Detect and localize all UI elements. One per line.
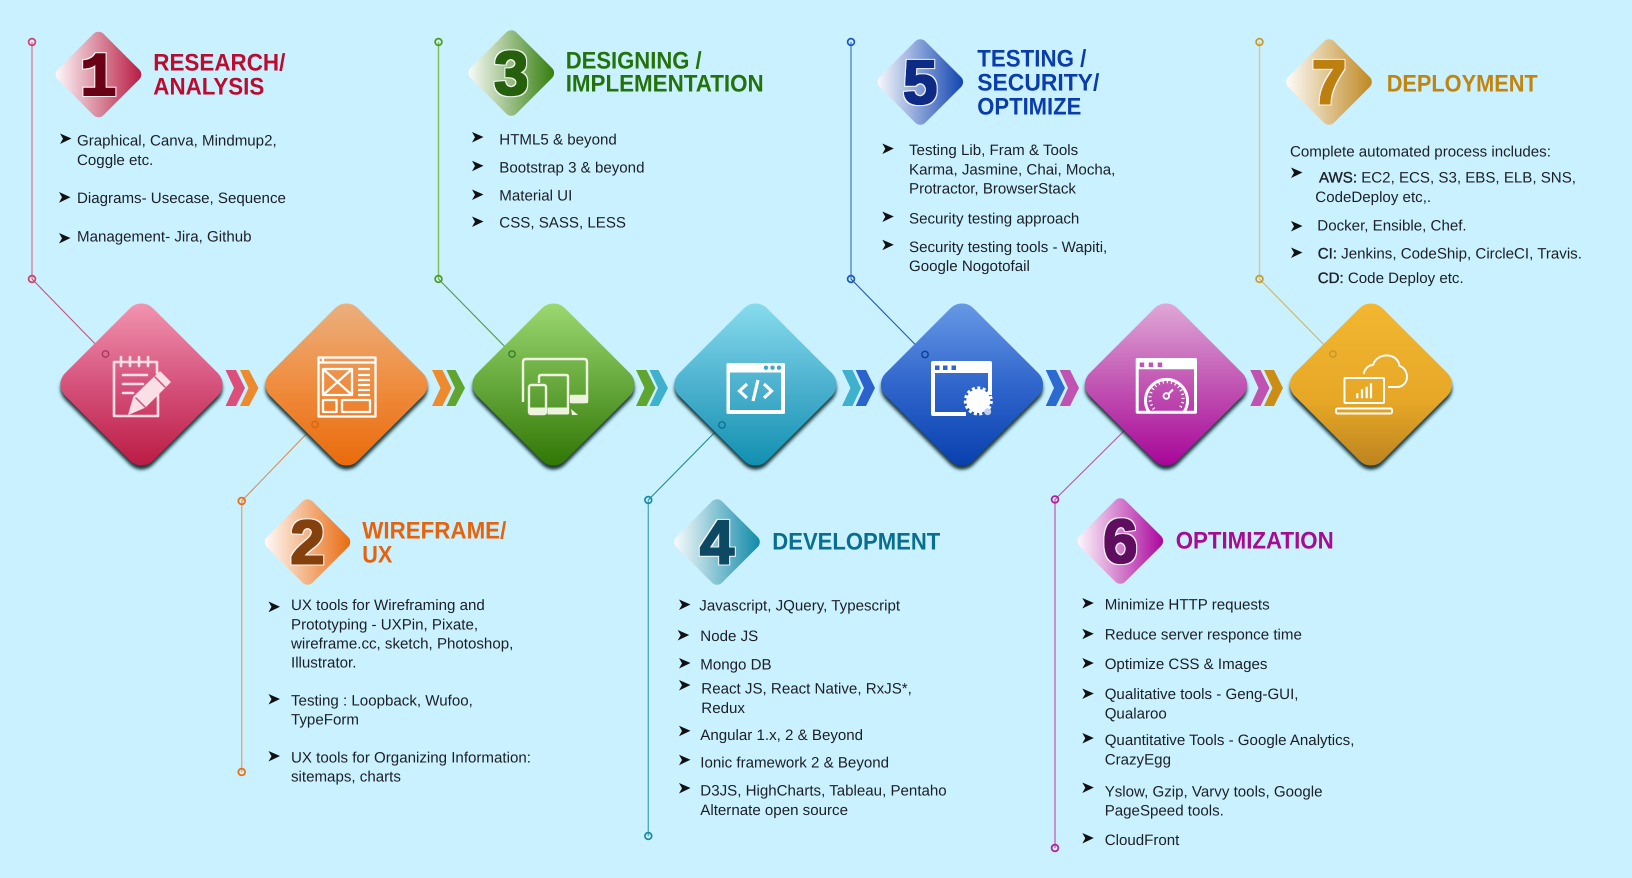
main diamond 7: cloud laptop [1283,297,1459,476]
list: development items: Redux [701,700,745,717]
list: development items: React JS, React Native, RxJS*, [701,681,912,698]
list: deployment items [1290,144,1582,287]
list: wireframe items: UX tools for Wireframing and [291,597,485,614]
icon: settings window [931,361,992,416]
panel: step 5 testing / security / optimize [875,36,1115,275]
heading: research analysis: RESEARCH/ [153,50,286,77]
list: optimization items: PageSpeed tools. [1105,802,1224,819]
list: optimization items: Minimize HTTP requests [1105,597,1270,614]
list: deployment items: CodeDeploy etc,. [1315,189,1431,206]
list: wireframe items [268,597,531,786]
list: designing items: Material UI [499,187,572,204]
list: development items: Node JS [700,628,758,645]
heading: research analysis: ANALYSIS [153,74,264,101]
badge: number 2: 2 [290,508,325,578]
connector: step 5 [848,39,925,354]
panel: step 6 optimization [1075,495,1354,849]
heading: testing security optimize: OPTIMIZE [977,93,1081,120]
connector: step 3 [435,39,512,354]
main diamond 6: speedometer [1078,297,1254,476]
icon: notepad and pencil [114,357,170,416]
badge: number 7: 7 [1312,48,1346,118]
list: research items: Graphical, Canva, Mindmup2, [77,133,277,150]
list: wireframe items: Prototyping - UXPin, Pixate, [291,616,478,633]
main diamond 1: notepad [54,297,229,476]
list: designing items: Bootstrap 3 & beyond [499,160,644,177]
list: optimization items: Qualaroo [1105,705,1167,722]
list: research items [59,133,286,246]
list: testing items: Security testing tools - Wapiti, [909,239,1107,256]
panel: step 3 designing / implementation [466,27,764,232]
arrow: step 1 to 2 [226,370,258,406]
badge: number 7 [1283,36,1375,128]
arrow: step 5 to 6 [1046,370,1079,406]
heading: designing implementation: DESIGNING / [566,47,702,74]
icon: code window [726,363,785,414]
list: optimization items: CrazyEgg [1105,751,1171,768]
icon: speedometer window [1136,358,1197,414]
heading: designing implementation [566,47,764,98]
connector: step 7 [1256,39,1333,354]
connector: step 2 [238,425,315,775]
icon: wireframe layout [318,358,376,416]
main diamond 2: wireframe [259,297,434,476]
heading: deployment: DEPLOYMENT [1387,71,1538,98]
arrow: step 2 to 3 [432,370,465,406]
heading: wireframe ux: WIREFRAME/ [362,518,507,545]
heading: designing implementation: IMPLEMENTATION [566,71,764,98]
main diamond 5: settings window [874,297,1050,476]
list: optimization items: Yslow, Gzip, Varvy tools, Google [1105,783,1323,800]
list: research items: Diagrams- Usecase, Sequence [77,190,286,207]
list: deployment items: CD: Code Deploy etc. [1318,270,1464,287]
badge: number 4: 4 [700,508,735,578]
list: optimization items: Reduce server responce time [1105,627,1302,644]
list: optimization items: Optimize CSS & Images [1105,656,1267,673]
badge: number 1: 1 [80,43,117,114]
list: testing items: Google Nogotofail [909,258,1030,275]
list: development items: Angular 1.x, 2 & Beyond [700,727,863,744]
badge: number 3: 3 [494,40,529,108]
list: deployment items: CI: Jenkins, CodeShip, CircleCI, Travis. [1318,246,1582,263]
panel: step 7 deployment [1283,36,1582,287]
list: wireframe items: Testing : Loopback, Wufoo, [291,693,473,710]
panel: step 2 wireframe / ux [262,496,531,786]
connector: step 4 [645,425,722,839]
heading: testing security optimize: TESTING / [977,46,1087,73]
heading: testing security optimize [977,46,1100,120]
badge: number 1 [53,29,144,120]
list: testing items [882,142,1115,275]
list: wireframe items: wireframe.cc, sketch, Photoshop, [290,635,513,652]
list: optimization items: Quantitative Tools - Google Analytics, [1105,732,1354,749]
connector: step 1 [29,39,105,354]
list: development items: Javascript, JQuery, Typescript [699,597,901,614]
badge: number 6: 6 [1103,508,1138,576]
list: deployment items: AWS: EC2, ECS, S3, EBS, ELB, SNS, [1319,170,1576,187]
list: wireframe items: Illustrator. [291,654,356,671]
panel: step 1 research / analysis [53,29,286,245]
heading: wireframe ux [362,518,507,568]
list: deployment items: Docker, Ensible, Chef. [1317,218,1467,235]
list: designing items: CSS, SASS, LESS [499,215,626,232]
list: optimization items [1082,597,1354,849]
list: optimization items: CloudFront [1105,832,1180,849]
list: research items: Coggle etc. [77,152,153,169]
main diamond 4: code window [668,297,843,476]
heading: development: DEVELOPMENT [772,528,941,555]
arrow: step 3 to 4 [636,370,668,406]
list: designing items [472,131,644,232]
badge: number 2 [262,496,353,588]
list: development items: Alternate open source [700,802,848,819]
list: testing items: Protractor, BrowserStack [909,180,1076,197]
heading: research analysis [153,50,286,101]
badge: number 5 [875,36,966,128]
list: designing items: HTML5 & beyond [499,131,617,148]
badge: number 5: 5 [903,48,938,118]
list: wireframe items: sitemaps, charts [291,769,401,786]
list: development items [678,597,947,819]
heading: wireframe ux: UX [362,541,392,568]
badge: number 6 [1075,495,1166,587]
heading: optimization: OPTIMIZATION [1176,528,1334,555]
list: optimization items: Qualitative tools - Geng-GUI, [1105,686,1298,703]
list: research items: Management- Jira, Github [77,228,252,246]
list: testing items: Security testing approach [909,210,1079,227]
list: development items: D3JS, HighCharts, Tableau, Pentaho [700,783,947,800]
arrow: step 6 to 7 [1250,370,1283,406]
list: development items: Ionic framework 2 & Beyond [700,755,889,772]
icon: laptop with cloud [1336,355,1407,414]
list: wireframe items: UX tools for Organizing Information: [291,750,531,767]
panel: step 4 development [671,496,947,819]
main diamond 3: devices [466,297,641,476]
badge: number 3 [466,27,557,119]
list: testing items: Karma, Jasmine, Chai, Mocha, [909,161,1115,178]
badge: number 4 [671,496,763,588]
icon: monitor, tablet and phone [523,359,587,415]
list: development items: Mongo DB [700,656,772,673]
list: deployment items: Complete automated process includes: [1290,144,1551,161]
connector: step 6 [1052,430,1125,851]
heading: testing security optimize: SECURITY/ [977,70,1100,97]
arrow: step 4 to 5 [842,370,875,406]
list: testing items: Testing Lib, Fram & Tools [909,142,1078,159]
list: wireframe items: TypeForm [291,712,359,729]
